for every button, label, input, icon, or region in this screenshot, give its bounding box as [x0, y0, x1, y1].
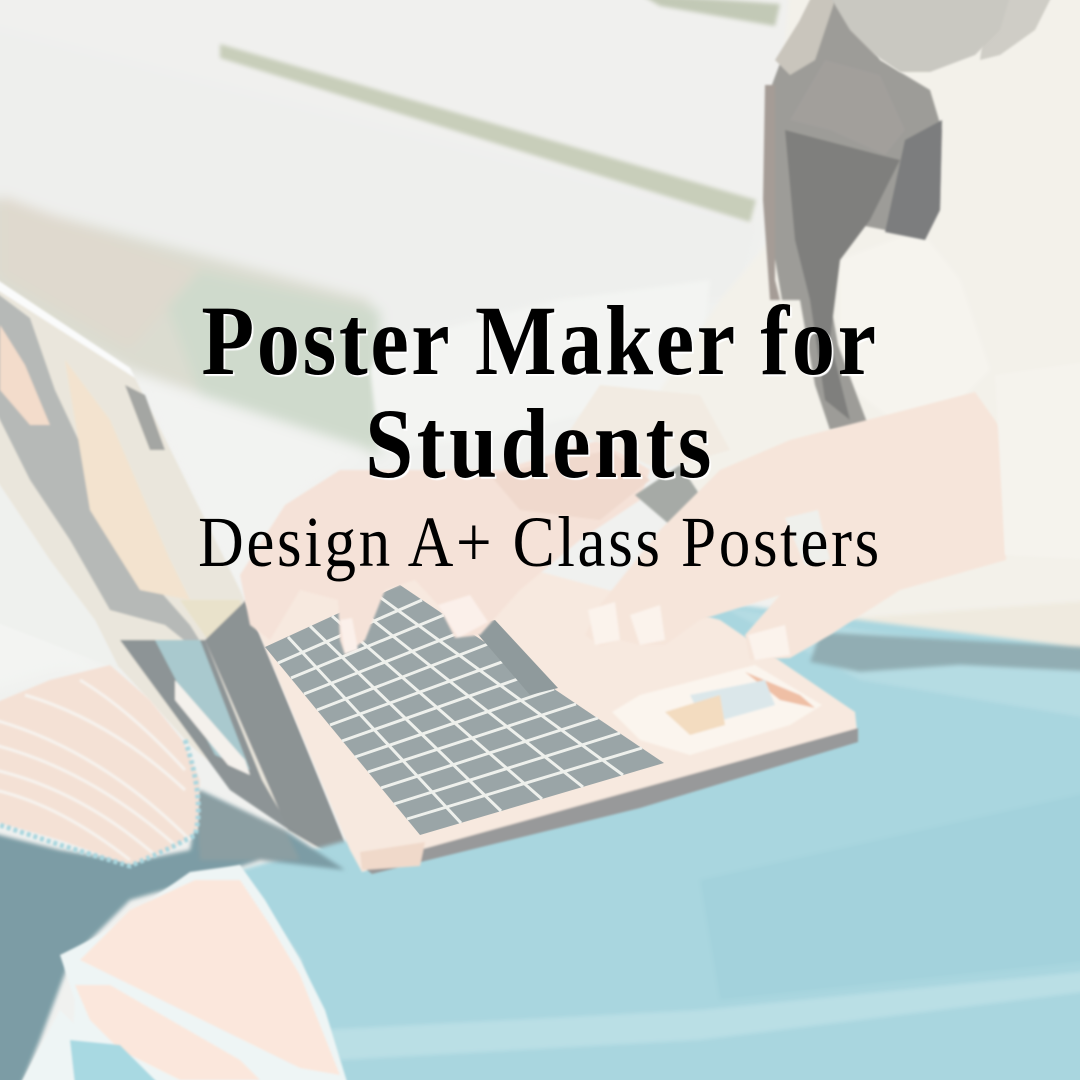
jeans — [240, 600, 1080, 1080]
scarf — [826, 0, 1012, 72]
dark jeans at left — [0, 790, 345, 1080]
sweater — [660, 0, 1080, 655]
right hand — [585, 392, 1006, 660]
subtitle: Design A+ Class Posters — [198, 502, 882, 582]
laptop base — [245, 545, 858, 874]
bracelet and sleeve — [570, 385, 730, 525]
left hand — [240, 440, 650, 655]
space bar — [470, 620, 558, 695]
title line 1: Poster Maker for — [201, 285, 879, 396]
keyboard — [265, 585, 664, 835]
title — [201, 285, 879, 499]
title line 2: Students — [365, 388, 715, 499]
bench gaps — [220, 0, 780, 222]
laptop sticker — [612, 665, 822, 755]
ripped knee skin upper — [0, 665, 200, 866]
ripped knee skin lower — [20, 865, 348, 1080]
sleeve cuff — [995, 360, 1080, 560]
mug — [370, 280, 710, 450]
bench planks — [0, 0, 800, 700]
hair — [763, 0, 1055, 430]
laptop lid — [0, 275, 362, 872]
